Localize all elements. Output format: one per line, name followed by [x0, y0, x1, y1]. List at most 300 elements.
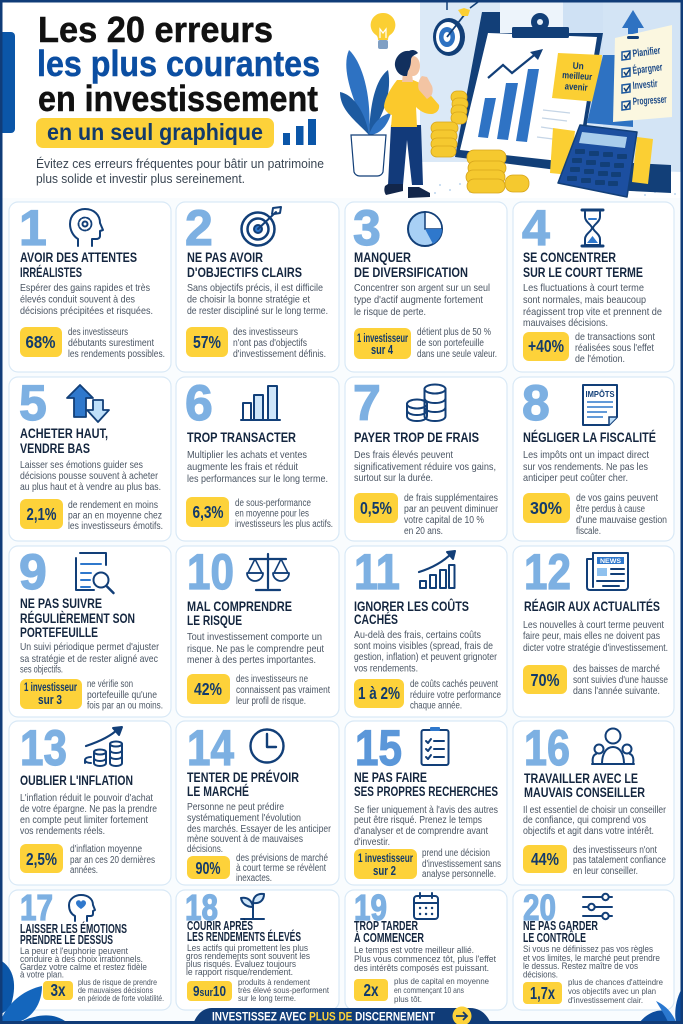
title: [354, 919, 424, 945]
person: [384, 50, 439, 198]
description: conduire à des choix irrationnels.: [20, 954, 143, 965]
title: les plus courantes: [37, 43, 320, 84]
stat badge: 90%: [196, 858, 221, 878]
intro text: plus solide et investir plus sereinement.: [36, 171, 245, 186]
stat text: [417, 327, 497, 360]
panel: card 19: [345, 887, 507, 1010]
stat text: d'inflation moyenne: [70, 844, 142, 855]
description: gros rendements sont souvent les: [186, 951, 310, 962]
stat text: années.: [70, 865, 98, 876]
title: À COMMENCER: [354, 930, 424, 945]
title: AVOIR DES ATTENTES: [20, 250, 137, 265]
description: [523, 283, 662, 329]
description: de rester discipliné sur le long terme.: [187, 306, 328, 317]
stat text: de transactions sont: [575, 332, 655, 343]
stat text: plus de chances d'atteindre: [568, 977, 663, 987]
description: surtout sur la durée.: [354, 473, 433, 484]
title: RÉGULIÈREMENT SON: [20, 611, 135, 626]
arrow up: [622, 10, 644, 34]
description: [187, 632, 324, 666]
stat text: [238, 977, 330, 1003]
intro text: Évitez ces erreurs fréquentes pour bâtir un patrimoine: [36, 156, 324, 171]
stat badge: [186, 327, 228, 357]
number 2: 2: [185, 200, 213, 256]
icon: light bulb: [371, 13, 395, 49]
panel: card 7: [345, 375, 507, 541]
description: de confiance, qui comprend vos: [523, 815, 646, 826]
title: [187, 770, 299, 799]
title: PRENDRE LE DESSUS: [20, 933, 113, 947]
description: sur vos rendements. Ne pas les: [523, 462, 648, 473]
stat badge: [523, 332, 569, 361]
description: sa stratégie et de rester aligné avec: [20, 654, 158, 665]
stat text: [410, 679, 501, 712]
title: PAYER TROP DE FRAIS: [354, 430, 479, 445]
number 17: 17: [20, 887, 53, 928]
stat text: les investisseurs émotifs.: [68, 521, 163, 532]
stat badge: [354, 979, 388, 1001]
description: [187, 450, 328, 485]
panel: card 3: [345, 200, 507, 372]
stat text: de rendement en moins: [68, 500, 158, 511]
stat text: produits à rendement: [238, 977, 311, 987]
checklist: Investir: [632, 78, 658, 92]
icon: sprout: [241, 894, 264, 919]
stat badge: [186, 497, 229, 527]
title: [187, 250, 302, 280]
clipboard: [455, 12, 603, 173]
description: le dessus. Restez maître de vos: [523, 961, 638, 972]
title: Les 20 erreurs: [38, 9, 273, 50]
stat badge: 2x: [364, 980, 379, 1000]
description: mène souvent à de mauvaises: [187, 834, 303, 845]
stat text: [233, 327, 326, 360]
description: vos rendements réels.: [20, 826, 105, 837]
stat text: par an ces 20 dernières: [70, 855, 155, 866]
title: LES RENDEMENTS ÉLEVÉS: [187, 929, 301, 944]
description: Les fluctuations à court terme: [523, 283, 644, 294]
title: SES PROPRES RECHERCHES: [354, 784, 498, 799]
title: SUR LE COURT TERME: [523, 265, 643, 280]
icon: head with gear: [70, 209, 103, 246]
title: [20, 921, 127, 947]
title: VENDRE BAS: [20, 441, 90, 456]
description: [523, 944, 660, 980]
description: le rapport risque/rendement.: [186, 967, 293, 978]
title: [20, 596, 135, 640]
description: de votre épargne. Ne pas la prendre: [20, 804, 157, 815]
panel: card 1: [9, 200, 171, 372]
stat text: analyse personnelle.: [422, 869, 496, 880]
title: LE MARCHÉ: [187, 784, 249, 799]
number 15: 15: [355, 720, 402, 776]
intro text: [36, 156, 324, 186]
stat badge: [523, 493, 570, 523]
leaves bottom left: [0, 960, 65, 1022]
title: D'OBJECTIFS CLAIRS: [187, 265, 302, 280]
stat text: [576, 493, 667, 537]
title: NE PAS GARDER: [523, 919, 598, 933]
number 4: 4: [522, 200, 550, 256]
number 12: 12: [524, 544, 571, 600]
description: [523, 450, 649, 484]
icon: document with magnifier: [76, 553, 114, 593]
description: [20, 642, 159, 676]
title: LE CONTRÔLE: [523, 930, 586, 945]
stat text: leur profil de risque.: [236, 696, 306, 707]
description: [354, 630, 497, 674]
description: Au-delà des frais, certains coûts: [354, 630, 481, 641]
title: NE PAS AVOIR: [187, 250, 263, 265]
panel: card 2: [176, 200, 339, 372]
title: MANQUER: [354, 250, 411, 265]
stat text: investisseurs les plus actifs.: [235, 519, 333, 530]
description: La peur et l'euphorie peuvent: [20, 946, 128, 957]
description: Personne ne peut prédire: [187, 802, 284, 813]
description: [523, 805, 666, 837]
trend arrow: [488, 49, 543, 78]
header illustration: [340, 2, 681, 198]
stat text: en 20 ans.: [404, 526, 443, 537]
panel: card 9: [9, 544, 171, 717]
title: [354, 250, 468, 280]
title: SE CONCENTRER: [523, 250, 616, 265]
stat text: n'ont pas d'objectifs: [233, 338, 307, 349]
description: vos rendements.: [354, 664, 418, 674]
description: [354, 283, 490, 318]
stat text: votre capital de 10 %: [404, 515, 484, 526]
stat text: de mauvaises décisions: [78, 985, 153, 995]
stat badge: [43, 980, 73, 1000]
description: gestion, inflation) et peuvent grignoter: [354, 652, 497, 663]
description: [20, 793, 157, 837]
stat text: les rendements possibles.: [68, 349, 165, 360]
stat text: plus de risque de prendre: [78, 977, 157, 987]
panel: card 5: [9, 375, 171, 541]
stat text: de son portefeuille: [417, 338, 484, 349]
checklist: Planifier: [632, 45, 661, 60]
stat text: [235, 498, 333, 530]
title: [187, 918, 301, 944]
title: OUBLIER L'INFLATION: [20, 773, 133, 788]
title: NE PAS FAIRE: [354, 770, 427, 785]
checklist: Épargner: [632, 60, 663, 77]
description: Espérer des gains rapides et très: [20, 283, 150, 294]
description: mauvaises décisions.: [523, 318, 608, 329]
description: Se fier uniquement à l'avis des autres: [354, 805, 498, 816]
stat text: plus tôt.: [394, 994, 422, 1004]
stat text: de l'émotion.: [575, 354, 625, 365]
description: décisions précipitées et risquées.: [20, 306, 153, 317]
description: Les actifs qui promettent les plus: [187, 943, 308, 954]
description: L'inflation réduit le pouvoir d'achat: [20, 793, 153, 804]
stat text: des investisseurs: [233, 327, 298, 338]
stat text: [422, 848, 501, 880]
icon: hourglass: [582, 210, 603, 246]
description: [187, 802, 331, 855]
icon: coins with arrow: [85, 727, 122, 766]
description: Gardez votre calme et restez fidèle: [20, 962, 147, 973]
number 11: 11: [354, 544, 400, 600]
stat text: à court terme se révèlent: [236, 863, 326, 874]
description: [523, 620, 668, 654]
title: MAUVAIS CONSEILLER: [524, 785, 645, 800]
description: [20, 460, 161, 493]
stat text: fois par an ou moins.: [87, 700, 163, 712]
stat badge: [187, 674, 230, 704]
stat text: être perdus à cause: [576, 504, 645, 515]
stat text: [87, 679, 163, 712]
stat badge: sur 3: [38, 692, 62, 707]
title: LAISSER LES ÉMOTIONS: [20, 921, 127, 936]
description: Plus vous commencez tôt, plus l'effet: [354, 954, 496, 965]
number 8: 8: [522, 375, 550, 431]
stat badge: 42%: [194, 679, 222, 699]
title: DE DIVERSIFICATION: [354, 265, 468, 280]
number 6: 6: [185, 375, 213, 431]
description: sont moins visibles (spread, frais de: [354, 641, 493, 652]
stat text: [394, 976, 489, 1004]
icon: newspaper: NEWS: [600, 559, 621, 565]
stat text: sur le long terme.: [238, 993, 296, 1003]
stat badge: [187, 856, 230, 879]
number 16: 16: [524, 720, 570, 776]
stat text: d'investissement clair.: [568, 995, 643, 1005]
title: [354, 770, 498, 799]
description: type d'actif augmente fortement: [354, 295, 483, 306]
stat text: des prévisions de marché: [236, 853, 328, 864]
icon: calendar: [414, 893, 438, 919]
stat badge: [187, 981, 232, 1001]
description: décisions.: [187, 844, 223, 855]
description: décisions.: [523, 970, 558, 980]
title: TRAVAILLER AVEC LE: [524, 771, 638, 786]
description: d'analyser et de comprendre avant: [354, 826, 488, 837]
stat text: de vos gains peuvent: [576, 493, 658, 504]
number 20: 20: [523, 887, 556, 928]
stat text: ne vérifie son: [87, 679, 133, 690]
icon: rising bars and arrow: [419, 551, 455, 588]
stat text: [573, 664, 668, 697]
stat text: vos objectifs avec un plan: [568, 986, 656, 996]
description: systématiquement l'évolution: [187, 813, 301, 824]
stat text: des baisses de marché: [573, 664, 660, 675]
description: Concentrer son argent sur un seul: [354, 283, 490, 294]
icon: bars: [241, 386, 280, 420]
description: anticiper peut coûter cher.: [523, 473, 628, 484]
description: les performances sur le long terme.: [187, 474, 328, 485]
stat text: pas tatalement confiance: [573, 855, 666, 866]
stat text: portefeuille qu'une: [87, 690, 157, 701]
stat text: réalisées sous l'effet: [575, 343, 654, 354]
description: [354, 945, 496, 974]
stat badge: [20, 327, 62, 357]
description: décisions pousse souvent à acheter: [20, 471, 158, 482]
title: COURIR APRÈS: [187, 918, 253, 933]
number 3: 3: [353, 200, 381, 256]
stat text: [68, 327, 165, 360]
stat text: [573, 845, 666, 877]
stat badge: [20, 499, 63, 529]
header left tab: [0, 32, 15, 133]
stat badge: 9sur10: [193, 983, 226, 1000]
icon: scales: [247, 554, 289, 590]
icon: checklist clipboard: [422, 727, 448, 765]
stat text: [404, 493, 499, 537]
stat badge: [20, 679, 82, 709]
stat badge: 44%: [531, 849, 559, 869]
title: [523, 919, 598, 945]
stat text: [568, 977, 663, 1005]
number 19: 19: [354, 887, 387, 928]
title: TROP TRANSACTER: [187, 430, 296, 445]
description: de choisir la bonne stratégie et: [187, 294, 310, 306]
icon: tax document: IMPÔTS: [586, 388, 615, 399]
icon: newspaper: [587, 553, 628, 590]
icon: pie chart: [408, 212, 442, 246]
stat badge: [523, 665, 567, 694]
stat badge: sur 2: [373, 863, 396, 878]
stat badge: sur 4: [371, 342, 394, 357]
stat text: par an peuvent diminuer: [404, 504, 499, 515]
description: objectifs et agit dans votre intérêt.: [523, 826, 654, 837]
description: plus risqués. Évaluez toujours: [186, 959, 296, 970]
description: augmente les frais et réduit: [187, 462, 298, 473]
description: [186, 943, 310, 978]
description: Les impôts ont un impact direct: [523, 450, 649, 461]
stat text: débutants surestiment: [68, 338, 154, 349]
bar chart on clipboard: [478, 69, 539, 142]
number 14: 14: [187, 720, 234, 776]
coins: [431, 91, 529, 193]
stat text: d'une mauvaise gestion: [576, 515, 667, 526]
stat text: [68, 500, 163, 532]
description: le risque de perte.: [354, 307, 426, 318]
number 7: 7: [353, 375, 381, 431]
footer banner: INVESTISSEZ AVEC PLUS DE DISCERNEMENT: [212, 1010, 436, 1024]
description: réagissent trop vite et prennent de: [523, 307, 662, 318]
stat badge: 2,1%: [26, 504, 57, 524]
panel: card 6: [176, 375, 339, 541]
icon: title bars: [283, 119, 316, 145]
stat text: très élevé sous-performent: [238, 985, 330, 995]
description: Le temps est votre meilleur allié.: [354, 945, 474, 956]
description: [20, 283, 153, 317]
subtitle badge: en un seul graphique: [47, 119, 263, 145]
icon: clock: [250, 730, 284, 762]
description: Des frais élevés peuvent: [354, 450, 453, 461]
description: d'investir.: [354, 837, 390, 848]
yellow note: [552, 53, 602, 102]
stat text: en leur conseiller.: [573, 866, 638, 877]
panel: card 11: [345, 544, 507, 717]
panel: card 17: [9, 887, 171, 1010]
plant and pot: [340, 50, 391, 176]
stat text: d'investissement définis.: [233, 349, 326, 360]
stat text: [78, 977, 164, 1003]
title: CACHÉS: [354, 612, 398, 627]
title: [524, 771, 645, 800]
icon: target: [433, 2, 478, 56]
stat badge: 57%: [193, 332, 221, 352]
yellow note: meilleur: [562, 70, 593, 83]
description: risque. Ne pas le comprendre peut: [187, 644, 324, 655]
stat badge: 68%: [26, 332, 56, 352]
description: Tout investissement comporte un: [187, 632, 322, 643]
panel: card 12: [513, 544, 674, 717]
stat text: connaissent pas vraiment: [236, 685, 330, 696]
stat badge: 6,3%: [192, 502, 224, 522]
panel: card 15: [345, 720, 507, 885]
description: Laisser ses émotions guider ses: [20, 460, 143, 471]
title: MAL COMPRENDRE: [187, 599, 292, 614]
description: au plus haut et à vendre au plus bas.: [20, 482, 161, 493]
icon: target: [242, 207, 281, 246]
panel: card 16: [513, 720, 674, 885]
header background: [0, 0, 683, 198]
stat text: des investisseurs ne: [236, 674, 308, 685]
stat text: dans une seule valeur.: [417, 349, 497, 360]
panel: card 10: [176, 544, 339, 717]
stat text: d'investissement sans: [422, 859, 501, 870]
description: en compte peut limiter fortement: [20, 815, 148, 826]
stat text: des investisseurs n'ont: [573, 845, 657, 856]
description: [20, 946, 147, 980]
stat text: des investisseurs: [68, 327, 128, 338]
description: des intérêts composés est puissant.: [354, 963, 489, 974]
description: élevés conduit souvent à des: [20, 294, 135, 306]
title: [20, 426, 108, 456]
stat text: [236, 853, 328, 884]
description: [187, 283, 328, 317]
stat badge: 1 investisseur: [24, 682, 77, 694]
stat text: sont suivies d'une hausse: [573, 675, 668, 686]
title: NE PAS SUIVRE: [20, 596, 102, 611]
stat badge: 1,7x: [530, 983, 555, 1003]
stat text: de coûts cachés peuvent: [410, 679, 498, 690]
description: [354, 805, 498, 848]
icon: people: [592, 728, 634, 764]
title: [37, 9, 320, 119]
description: ses objectifs.: [20, 664, 63, 676]
description: peut être risqué. Prenez le temps: [354, 815, 482, 826]
title: [20, 250, 137, 280]
icon: up and down arrows: [67, 385, 109, 422]
description: Multiplier les achats et ventes: [187, 450, 307, 461]
stat badge: +40%: [528, 336, 564, 356]
leaves bottom right: [640, 990, 681, 1022]
yellow note: avenir: [564, 81, 588, 94]
title: TROP TARDER: [354, 919, 418, 933]
number 10: 10: [187, 544, 234, 600]
stat badge: 0,5%: [360, 498, 392, 518]
icon: sliders: [583, 894, 612, 919]
panel: card 8: [513, 375, 674, 541]
description: à votre plan.: [20, 970, 64, 980]
stat badge: 2,5%: [26, 849, 57, 869]
title: [354, 599, 469, 627]
description: mener à des pertes importantes.: [187, 655, 316, 666]
stat text: fiscale.: [576, 526, 601, 537]
stat badge: [354, 849, 417, 879]
title: en investissement: [38, 78, 318, 119]
yellow note: Un: [572, 61, 584, 72]
stat text: [236, 674, 330, 707]
stat badge: 1 à 2%: [358, 683, 400, 703]
stat text: prend une décision: [422, 848, 490, 859]
icon: coin stacks: [407, 384, 446, 421]
stat text: [70, 844, 155, 876]
